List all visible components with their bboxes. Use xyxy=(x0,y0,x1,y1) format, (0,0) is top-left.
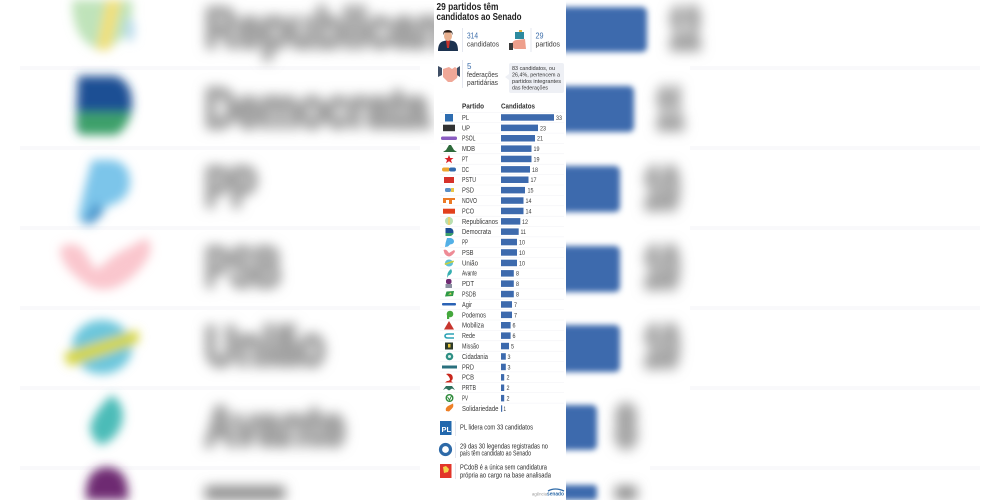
row: PSOL xyxy=(441,135,543,143)
row: MDB: MDB xyxy=(462,146,475,153)
row: DC: 18 xyxy=(532,167,538,174)
icon: PL badge xyxy=(440,421,452,435)
row: União: União xyxy=(462,260,478,267)
row: Missão: Missão xyxy=(462,344,479,350)
row: Missão xyxy=(445,342,514,350)
row: Rede xyxy=(445,332,516,340)
icon: PCdoB xyxy=(440,464,452,478)
row: PV xyxy=(446,395,510,402)
row: Missão: 5 xyxy=(511,344,514,350)
row: MDB: 19 xyxy=(534,146,540,153)
note: PCdoB: PCdoB é a única sem candidatura xyxy=(460,464,547,472)
row: PL xyxy=(445,114,562,122)
row: PP xyxy=(445,238,525,247)
row: Avante: 8 xyxy=(516,271,519,278)
row: PDT xyxy=(446,279,519,288)
table headers: Partido xyxy=(462,104,484,110)
stat: 314 candidatos xyxy=(467,32,499,48)
row: PV: 2 xyxy=(506,396,510,402)
row: PCB: PCB xyxy=(462,375,474,382)
row: PSB: PSB xyxy=(462,250,474,257)
row: Avante xyxy=(447,269,519,278)
row: PT xyxy=(444,155,540,163)
row: Solidariedade: Solidariedade xyxy=(462,406,499,413)
row: PSDB: 8 xyxy=(516,292,519,298)
row: Mobiliza: 6 xyxy=(512,323,516,330)
row: PCO: 14 xyxy=(526,208,532,215)
blurred background: enlarged chart, left side: União xyxy=(205,315,325,377)
row: PV: PV xyxy=(462,396,468,402)
logo: agência senado: senado xyxy=(547,492,565,498)
blurred background: enlarged chart, left side: PSB xyxy=(205,236,281,298)
row: DC: DC xyxy=(462,167,469,174)
stat: 5 federações partidárias: 5 xyxy=(467,62,472,71)
blurred background: enlarged chart, right side bars: 8 xyxy=(616,395,636,457)
row: PP: 10 xyxy=(519,240,525,246)
row: PRTB: 2 xyxy=(506,385,510,392)
blurred background: enlarged chart, right side bars: 10 xyxy=(645,157,679,219)
stat: 314 candidatos: candidatos xyxy=(467,40,499,48)
row: Mobiliza xyxy=(444,321,516,330)
row: PSD: PSD xyxy=(462,188,474,195)
row: Agir: Agir xyxy=(462,302,473,309)
row: PRTB xyxy=(443,384,510,392)
row: União: 10 xyxy=(519,260,525,267)
note: PCdoB xyxy=(460,464,551,480)
logo: agência senado xyxy=(532,489,565,498)
callout: federations note: 26,4%, pertencem a xyxy=(512,72,561,78)
row: UP: UP xyxy=(462,125,470,132)
panel: infographic card xyxy=(434,0,566,500)
row: PRD: PRD xyxy=(462,364,474,371)
row: Republicanos xyxy=(445,217,528,226)
row: NOVO: NOVO xyxy=(462,198,477,205)
row: PT: 19 xyxy=(534,156,540,163)
blurred background: enlarged chart, right side bars: 10 xyxy=(645,315,679,377)
row: PSTU: PSTU xyxy=(462,177,476,184)
row: PCB xyxy=(445,374,510,382)
note: PCdoB: própria ao cargo na base analisada xyxy=(460,472,551,480)
row: Democrata xyxy=(446,228,526,236)
row: PSOL: 21 xyxy=(537,136,543,143)
stat: 314 candidatos: 314 xyxy=(467,32,478,40)
row: PRD: 3 xyxy=(508,364,511,371)
stat: 5 federações partidárias: federações xyxy=(467,70,498,79)
row: Agir: 7 xyxy=(514,302,517,309)
row: PSTU xyxy=(444,176,537,184)
row: PSOL: PSOL xyxy=(462,136,476,143)
stat: 29 partidos: 29 xyxy=(536,32,544,40)
note: 29 of 30 parties: 29 das 30 legendas registradas no xyxy=(460,444,548,450)
blurred background: enlarged chart, right side bars: 10 xyxy=(645,236,679,298)
note: 29 of 30 parties xyxy=(460,444,548,458)
table headers: Candidatos xyxy=(501,104,535,110)
logo: agência senado: agência xyxy=(532,492,547,498)
row: PL: 33 xyxy=(556,115,562,122)
divider xyxy=(530,28,532,52)
row: PSDB xyxy=(445,291,519,298)
row: PDT: PDT xyxy=(462,281,475,288)
blurred background: enlarged chart, left side: Democrata xyxy=(205,77,429,139)
row: DC xyxy=(442,166,538,174)
row: PT: PT xyxy=(462,156,468,163)
stat: 29 partidos: partidos xyxy=(536,40,560,48)
icon: hand voting xyxy=(509,30,526,50)
row: PSD xyxy=(445,187,534,195)
row: Democrata: Democrata xyxy=(462,229,491,236)
row: PP: PP xyxy=(462,240,468,246)
bar chart: candidates per party xyxy=(440,112,564,413)
row: NOVO: 14 xyxy=(526,198,532,205)
row: PCB: 2 xyxy=(506,375,510,382)
stat: 29 partidos xyxy=(536,32,560,48)
row: Agir xyxy=(442,301,517,309)
row: PSB: 10 xyxy=(519,250,525,257)
row: PDT: 8 xyxy=(516,281,519,288)
note: PL leads: PL lidera com 33 candidatos xyxy=(460,424,533,432)
blurred background: enlarged chart, right side bars xyxy=(540,0,700,500)
row: PL: PL xyxy=(462,115,469,122)
icon: handshake xyxy=(438,66,460,82)
blurred background: enlarged chart, left side: Avante xyxy=(205,395,345,457)
row: PSTU: 17 xyxy=(530,177,537,184)
blurred background: enlarged chart, left side: PP xyxy=(205,156,257,218)
row: PCO: PCO xyxy=(462,208,474,215)
row: Solidariedade xyxy=(446,404,506,413)
row: PRTB: PRTB xyxy=(462,385,476,392)
row: Avante: Avante xyxy=(462,271,477,278)
divider xyxy=(454,463,456,479)
callout: federations note: 83 candidatos, ou xyxy=(512,66,555,72)
row: Cidadania: Cidadania xyxy=(462,354,488,361)
divider xyxy=(454,442,456,458)
row: PSDB: PSDB xyxy=(462,292,476,298)
divider xyxy=(454,421,456,436)
note: 29 of 30 parties: país têm candidato ao Senado xyxy=(460,450,531,458)
row: Democrata: 11 xyxy=(520,229,526,236)
table headers xyxy=(462,104,535,110)
row: Rede: 6 xyxy=(512,333,516,340)
icon: PL badge: PL xyxy=(442,425,452,434)
row: Mobiliza: Mobiliza xyxy=(462,323,484,330)
row: MDB xyxy=(443,145,540,153)
callout: federations note: partidos integrantes xyxy=(512,79,561,85)
row: PRD xyxy=(442,364,511,371)
row: Podemos: 7 xyxy=(514,312,517,319)
title: candidatos ao Senado xyxy=(436,12,522,23)
row: UP: 23 xyxy=(540,125,546,132)
title: 29 partidos têm xyxy=(436,2,499,13)
row: Podemos: Podemos xyxy=(462,312,486,319)
stat: 5 federações partidárias: partidárias xyxy=(467,78,498,87)
row: Solidariedade: 1 xyxy=(504,406,506,413)
row: Podemos xyxy=(447,311,517,319)
icon: blue ring xyxy=(440,444,450,454)
row: Cidadania: 3 xyxy=(508,354,511,361)
icon: candidate person xyxy=(438,30,458,51)
row: Rede: Rede xyxy=(462,333,475,340)
row: PSD: 15 xyxy=(528,188,534,195)
row: Republicanos: Republicanos xyxy=(462,219,498,226)
stat: 5 federações partidárias xyxy=(467,62,498,87)
callout: federations note xyxy=(505,63,564,93)
row: PSB xyxy=(444,249,525,257)
row: União xyxy=(444,260,525,267)
row: UP xyxy=(443,125,546,132)
row: PCO xyxy=(443,208,532,215)
blurred background: enlarged chart, right side bars: 11 xyxy=(657,77,683,139)
divider xyxy=(462,28,464,52)
divider xyxy=(462,60,464,88)
row: Republicanos: 12 xyxy=(522,219,528,226)
callout: federations note: das federações xyxy=(512,85,548,91)
row: NOVO xyxy=(443,197,532,205)
row: Cidadania xyxy=(446,353,511,361)
